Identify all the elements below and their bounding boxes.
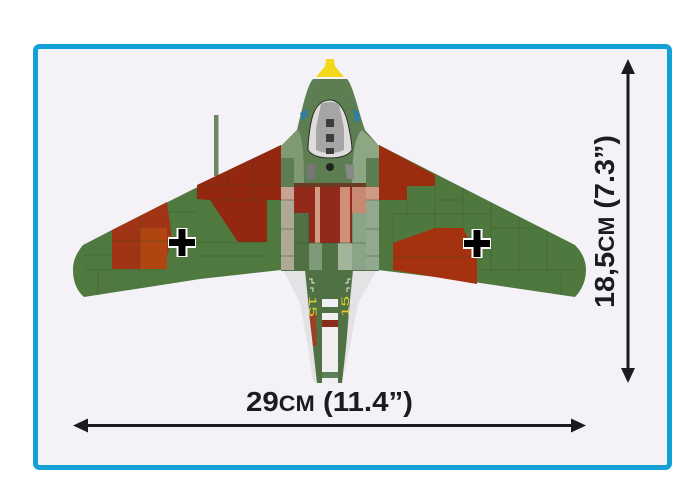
right wing lower camouflage: [393, 228, 477, 284]
right wing: [378, 145, 586, 297]
tail small markings: [309, 279, 351, 292]
balkenkreuz right: [463, 229, 491, 258]
infographic: [33, 44, 672, 470]
aircraft model: [73, 59, 586, 383]
height dimension label: 18,5CM (7.3”): [589, 135, 620, 308]
yellow nose cone: [316, 59, 344, 77]
canopy: [308, 100, 352, 158]
left wing outer camouflage: [112, 202, 172, 269]
centre camouflage: [294, 187, 366, 243]
antenna mast: [214, 115, 218, 176]
right wing upper camouflage: [379, 145, 435, 200]
balkenkreuz left: [168, 228, 196, 257]
panel: framed background: [36, 46, 670, 468]
left wing inner camouflage: [197, 145, 281, 242]
tail number right: 15: [340, 296, 352, 317]
width dimension label: 29CM (11.4”): [246, 386, 413, 417]
forward fuselage: [281, 79, 379, 187]
fuselage: [281, 79, 379, 271]
left wing: [73, 145, 281, 297]
wing root bands: [281, 158, 294, 200]
width arrow: [73, 418, 586, 432]
side windows and gun port: [300, 109, 360, 180]
tail section: [283, 270, 377, 383]
tail number left: 15: [306, 296, 318, 317]
height arrow: [621, 59, 635, 383]
